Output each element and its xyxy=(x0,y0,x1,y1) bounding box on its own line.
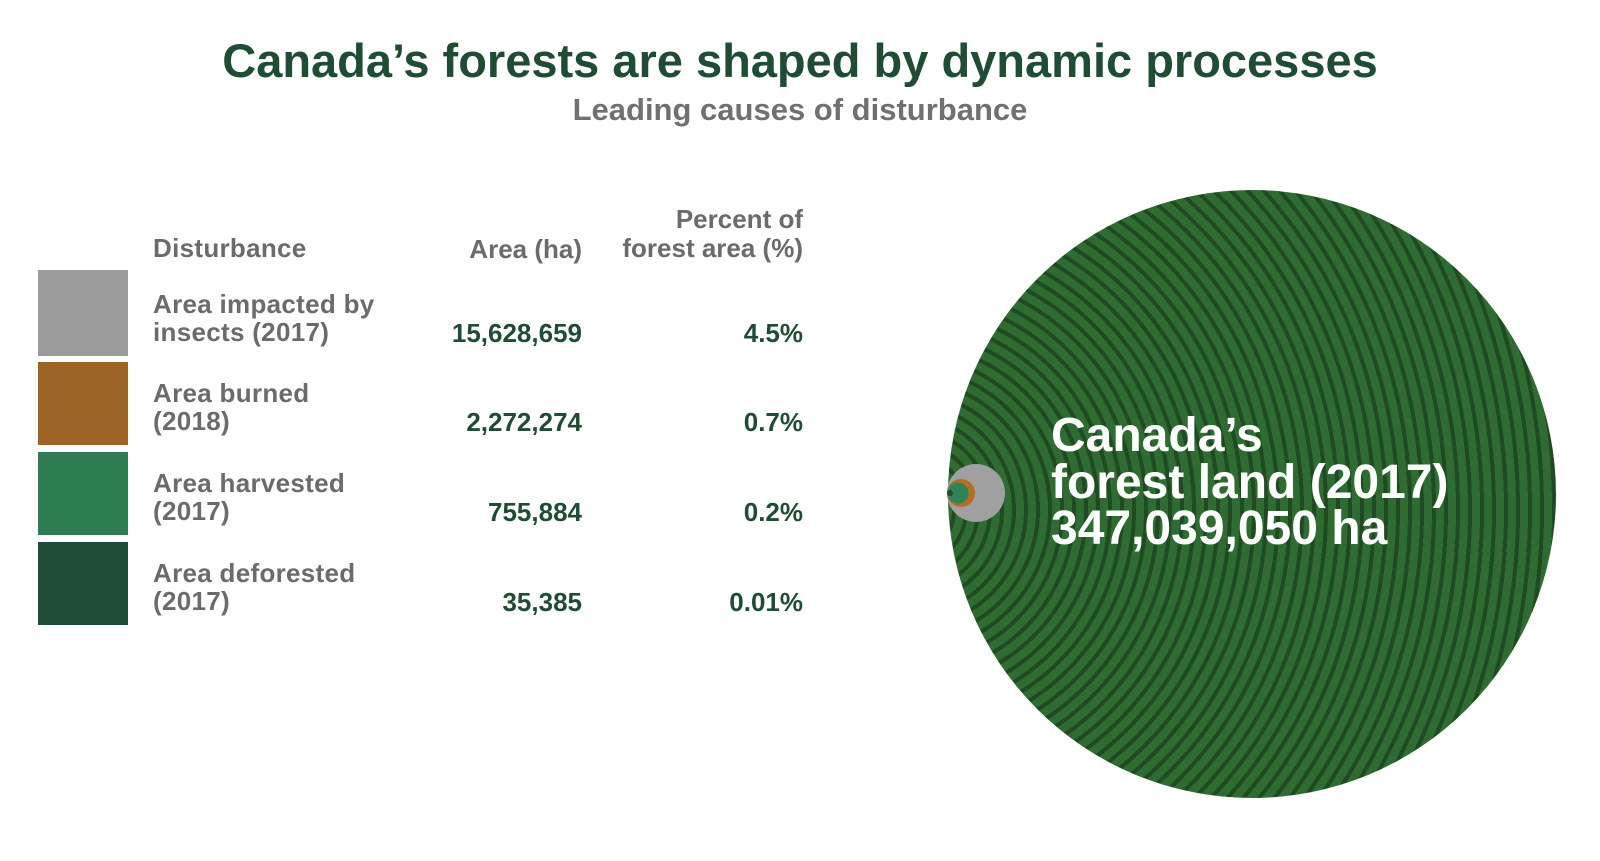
percent: deforested: 0.01% xyxy=(729,587,803,617)
label: burned xyxy=(153,378,309,436)
value: burned: 2,272,274 xyxy=(466,407,582,437)
percent: insects: 4.5% xyxy=(744,318,803,348)
label: burned: Area burned xyxy=(153,378,309,408)
header: percent: Percent of xyxy=(676,204,803,234)
label: insects: Area impacted by xyxy=(153,289,375,319)
circle label: forest land (2017) xyxy=(1051,456,1448,508)
label: deforested: (2017) xyxy=(153,586,230,616)
circle: harvested xyxy=(948,482,968,504)
percent: harvested: 0.2% xyxy=(744,497,803,527)
subtitle: Leading causes of disturbance xyxy=(573,92,1027,127)
circle: insects xyxy=(947,464,1005,522)
percent: burned: 0.7% xyxy=(744,407,803,437)
label: burned: (2018) xyxy=(153,406,230,436)
label: harvested: (2017) xyxy=(153,496,230,526)
table xyxy=(38,204,804,625)
label: deforested xyxy=(153,558,355,616)
label: insects xyxy=(153,289,375,347)
forest land circle xyxy=(948,190,1556,798)
swatch: harvested xyxy=(38,452,128,535)
title: Canada’s forests are shaped by dynamic processes xyxy=(222,34,1378,87)
label: deforested: Area deforested xyxy=(153,558,355,588)
swatch: insects xyxy=(38,270,128,356)
label: insects: insects (2017) xyxy=(153,317,329,347)
circle label: 347,039,050 ha xyxy=(1051,502,1387,555)
value: insects: 15,628,659 xyxy=(452,318,582,348)
circle label: Canada’s xyxy=(1051,409,1263,462)
swatch: deforested xyxy=(38,542,128,625)
circle label xyxy=(1051,409,1448,555)
header: percent: forest area (%) xyxy=(622,233,803,263)
value: deforested: 35,385 xyxy=(502,587,582,617)
label: harvested: Area harvested xyxy=(153,468,345,498)
value: harvested: 755,884 xyxy=(488,497,582,527)
circle: deforested xyxy=(947,490,953,496)
swatch: burned xyxy=(38,362,128,445)
header: percent xyxy=(622,204,804,263)
nested disturbance circles xyxy=(947,464,1005,522)
label: harvested xyxy=(153,468,345,526)
circle: burned xyxy=(947,479,975,507)
header: area: Area (ha) xyxy=(469,234,582,264)
header: disturbance: Disturbance xyxy=(153,233,307,263)
